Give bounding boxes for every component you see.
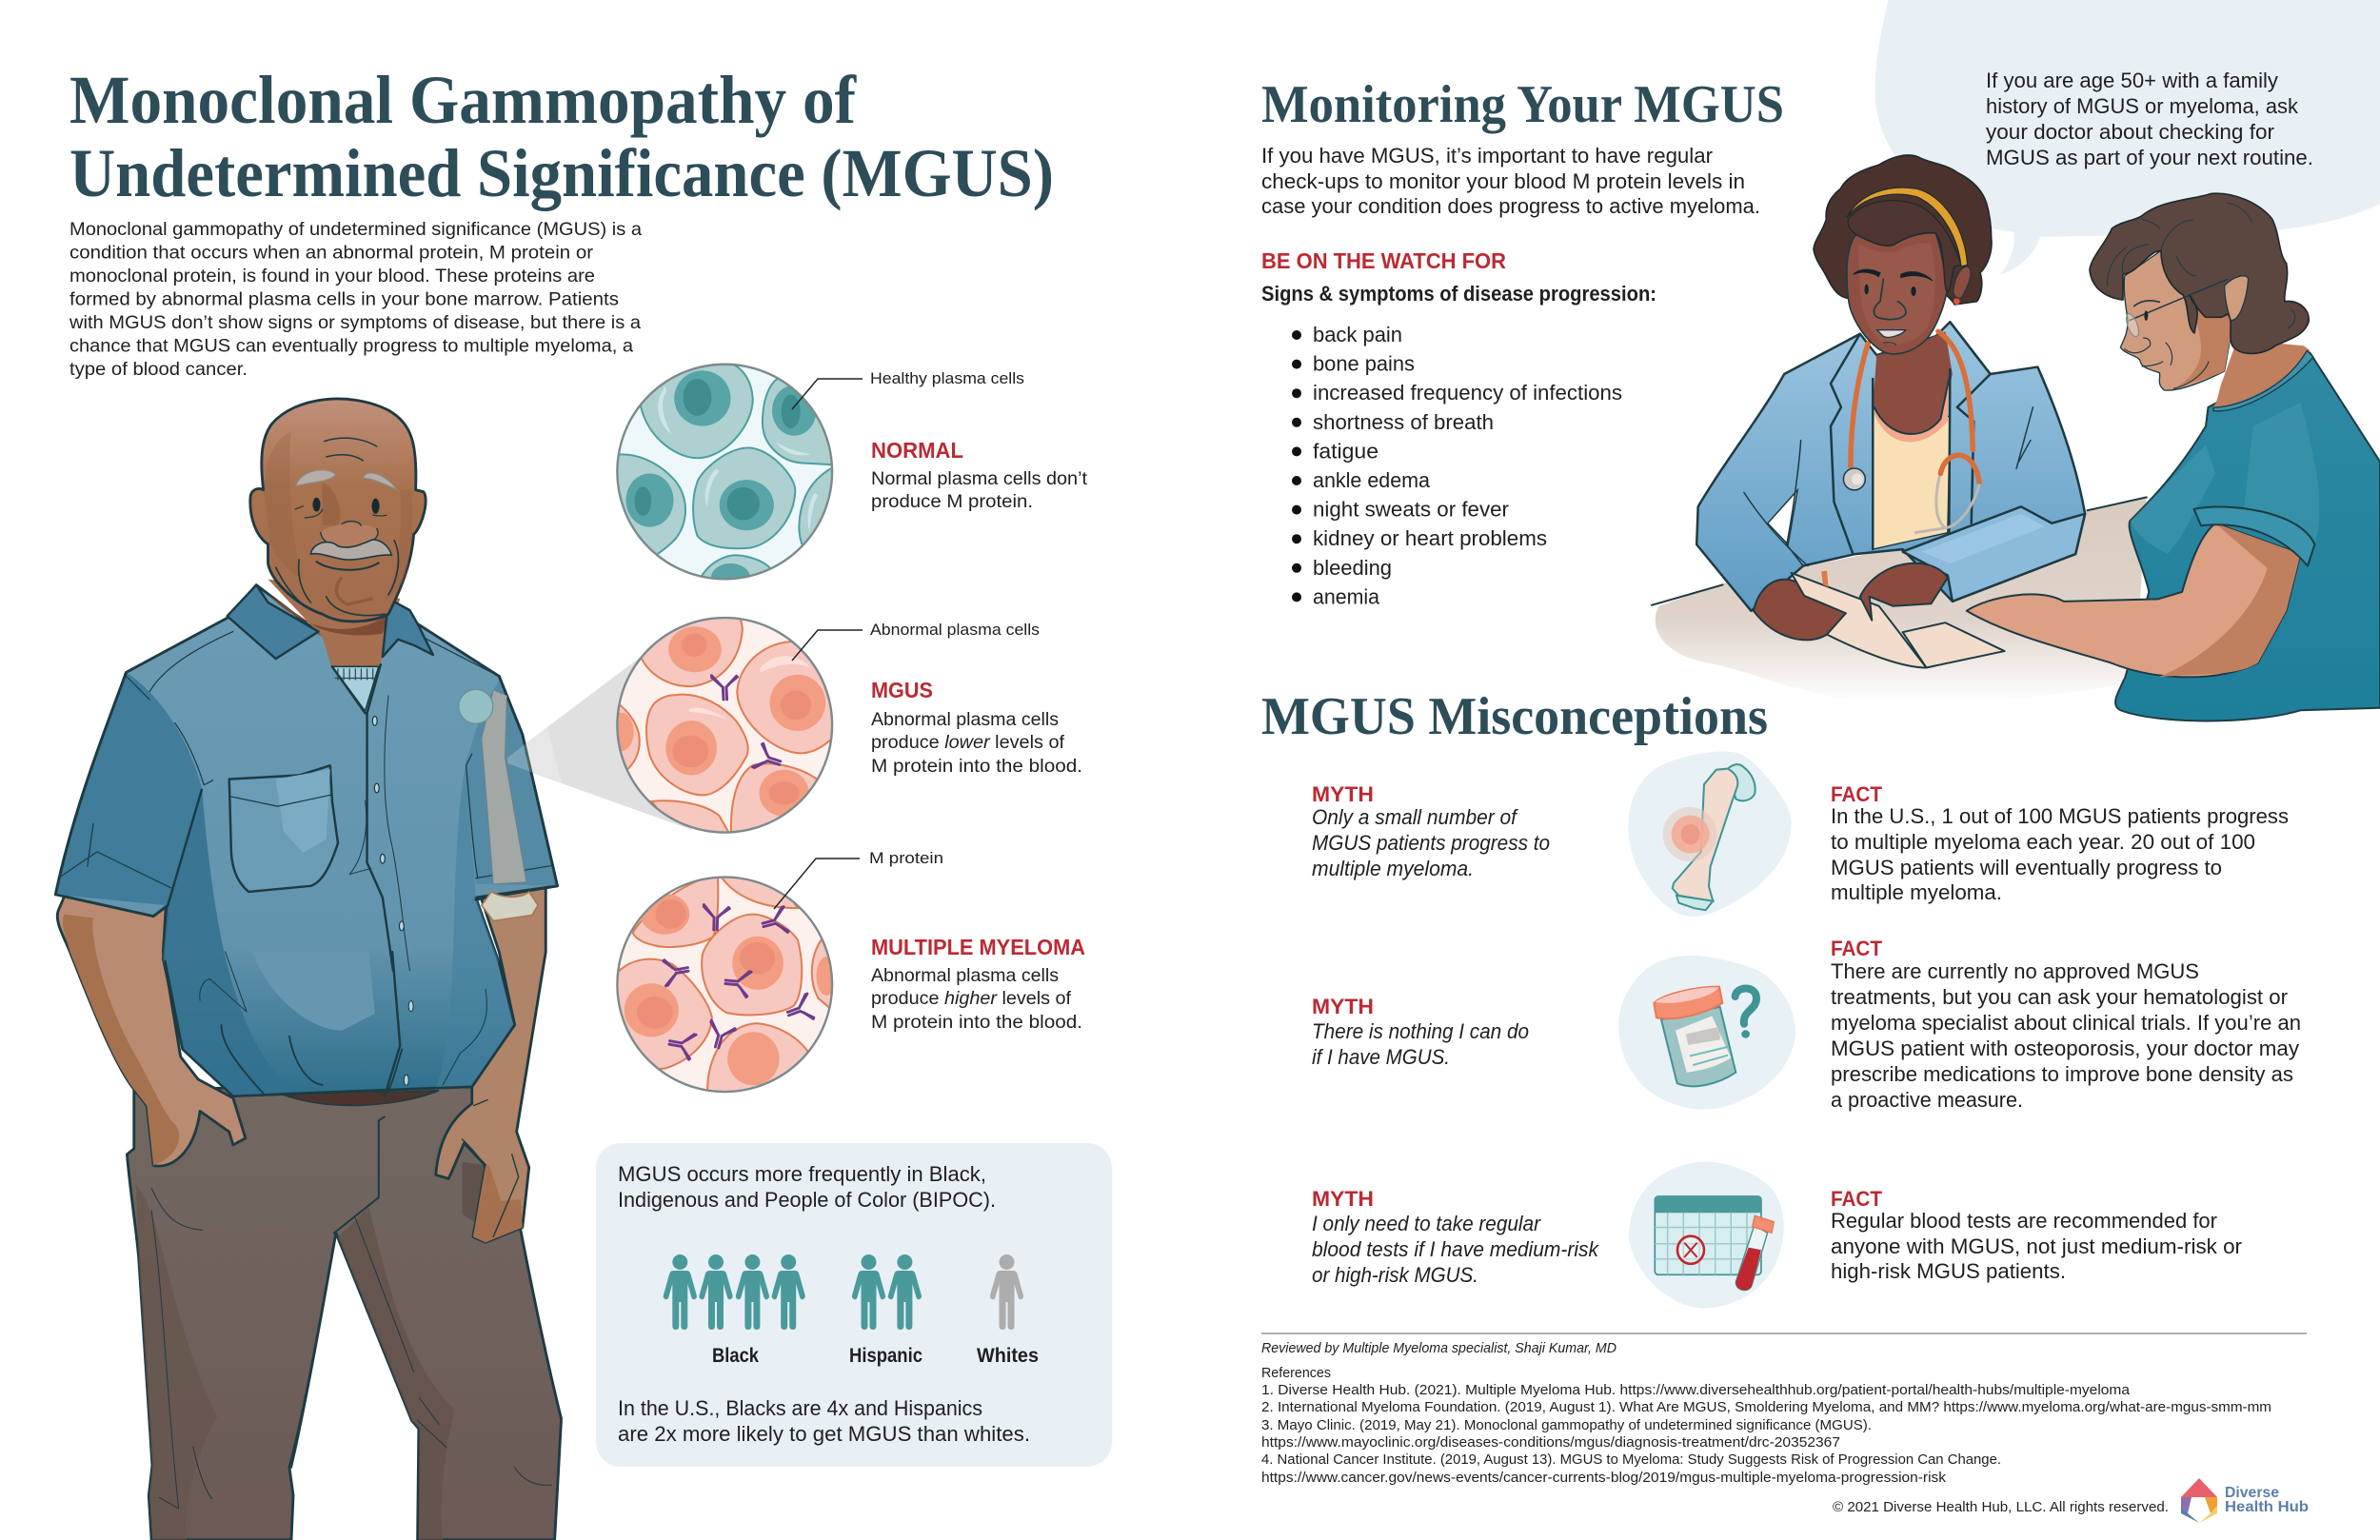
fact 3: Regular blood tests are recommended for <box>1831 1209 2217 1233</box>
callout cone from bone to MGUS circle <box>506 657 692 830</box>
references: https://www.cancer.gov/news-events/cancer-currents-blog/2019/mgus-multiple-myeloma-progression-risk <box>1261 1471 1947 1486</box>
symptom list: increased frequency of infections <box>1313 381 1622 405</box>
symptom list: kidney or heart problems <box>1313 526 1547 550</box>
pocket <box>229 765 338 892</box>
heading: misconceptions: MGUS Misconceptions <box>1261 687 1768 746</box>
icon: logo hexagon <box>2181 1478 2217 1523</box>
fact 2: MGUS patient with osteoporosis, your doctor may <box>1831 1037 2300 1060</box>
myth 1: MYTH <box>1312 782 1374 806</box>
panel: BIPOC statistic box: Whites <box>977 1345 1039 1367</box>
heading: monitoring: Monitoring Your MGUS <box>1261 75 1784 134</box>
cell labels and descriptions: Abnormal plasma cells <box>871 709 1059 730</box>
myth 1: MGUS patients progress to <box>1312 831 1550 855</box>
myth 1: Only a small number of <box>1312 805 1519 829</box>
panel: BIPOC statistic box <box>596 1143 1112 1467</box>
speech bubble <box>1875 0 2380 275</box>
intro text block: monoclonal protein, is found in your blood. These proteins are <box>69 266 595 286</box>
shirt <box>55 399 557 1096</box>
panel: BIPOC statistic box: are 2x more likely to get MGUS than whites. <box>618 1422 1030 1446</box>
speech bubble text: history of MGUS or myeloma, ask <box>1986 94 2299 118</box>
symptom list <box>1292 323 1622 608</box>
icon: bone with pain <box>1628 752 1792 917</box>
intro text block: formed by abnormal plasma cells in your bone marrow. Patients <box>69 289 619 310</box>
patient arm <box>1967 523 2300 677</box>
panel: BIPOC statistic box: In the U.S., Blacks are 4x and Hispanics <box>618 1396 982 1420</box>
monitoring text: If you have MGUS, it’s important to have regular <box>1261 144 1713 168</box>
watch for heading: Signs & symptoms of disease progression: <box>1261 282 1656 306</box>
pants <box>127 1087 562 1540</box>
intro text block <box>69 219 642 380</box>
M protein antibodies <box>662 674 816 1060</box>
fact 2 <box>1831 937 2301 1112</box>
cell labels and descriptions <box>869 369 1088 1033</box>
logo: Health Hub <box>2225 1499 2309 1515</box>
references: References <box>1261 1366 1331 1381</box>
myth 2: MYTH <box>1312 995 1374 1018</box>
fact 3 <box>1831 1187 2242 1283</box>
logo <box>2181 1478 2309 1523</box>
panel: BIPOC statistic box: MGUS occurs more frequently in Black, <box>618 1162 986 1186</box>
stethoscope <box>1851 331 1979 483</box>
watch for heading <box>1261 248 1656 306</box>
title: Monoclonal Gammopathy of <box>69 62 857 138</box>
table <box>1656 497 2147 702</box>
undershirt <box>332 666 379 711</box>
fact 2: a proactive measure. <box>1831 1088 2023 1112</box>
myth 3: blood tests if I have medium-risk <box>1312 1237 1600 1261</box>
cell labels and descriptions: produce lower levels of <box>871 732 1065 753</box>
fact 1: MGUS patients will eventually progress to <box>1831 856 2222 879</box>
arms and hands <box>57 888 545 1242</box>
cell labels and descriptions: M protein into the blood. <box>871 756 1082 777</box>
icons: people <box>664 1254 1023 1330</box>
myth 1 <box>1312 782 1550 880</box>
panel: BIPOC statistic box: Indigenous and People of Color (BIPOC). <box>618 1188 996 1212</box>
references: 4. National Cancer Institute. (2019, August 13). MGUS to Myeloma: Study Suggests Risk of Progression Can Change. <box>1261 1452 2001 1468</box>
cell labels and descriptions: MGUS <box>871 678 933 702</box>
fact 1: multiple myeloma. <box>1831 880 2002 904</box>
cell labels and descriptions: MULTIPLE MYELOMA <box>871 935 1085 959</box>
myth 3: MYTH <box>1312 1187 1374 1211</box>
fact 2: FACT <box>1831 937 1882 960</box>
intro text block: type of blood cancer. <box>69 359 248 380</box>
copyright: © 2021 Diverse Health Hub, LLC. All rights reserved. <box>1833 1500 2169 1515</box>
cell labels and descriptions: Normal plasma cells don’t <box>871 468 1088 489</box>
fact 3: high-risk MGUS patients. <box>1831 1259 2066 1283</box>
placket <box>367 713 393 971</box>
logo: Diverse <box>2225 1485 2279 1501</box>
myth 1: multiple myeloma. <box>1312 857 1474 880</box>
patient body <box>1967 353 2380 721</box>
fact 2: There are currently no approved MGUS <box>1831 959 2199 983</box>
patient head <box>2090 193 2313 411</box>
myth 3 <box>1312 1187 1600 1287</box>
cell labels and descriptions: Healthy plasma cells <box>870 369 1024 387</box>
symptom list: anemia <box>1313 584 1379 608</box>
myth 3: I only need to take regular <box>1312 1212 1541 1235</box>
cell labels and descriptions: produce higher levels of <box>871 988 1072 1009</box>
myth 2 <box>1312 995 1529 1069</box>
fact 3: FACT <box>1831 1187 1882 1211</box>
panel: MGUS cells circle <box>608 615 835 836</box>
doctor head <box>1814 155 1992 354</box>
references: 2. International Myeloma Foundation. (2019, August 1). What Are MGUS, Smoldering Myeloma, and MM? https://www.myeloma.org/what-are-mgus-smm-mm <box>1261 1400 2271 1415</box>
symptom list: shortness of breath <box>1313 410 1494 434</box>
collar <box>228 585 319 659</box>
cell labels and descriptions: produce M protein. <box>871 491 1033 512</box>
icon: jar with question mark <box>1618 956 1795 1110</box>
monitoring text: case your condition does progress to active myeloma. <box>1261 194 1760 218</box>
cell labels and descriptions: NORMAL <box>871 438 963 463</box>
panel: BIPOC statistic box: Black <box>712 1345 759 1367</box>
intro text block: Monoclonal gammopathy of undetermined significance (MGUS) is a <box>69 219 642 240</box>
patient sleeve <box>2194 506 2314 566</box>
title: Undetermined Significance (MGUS) <box>69 135 1054 211</box>
symptom list: night sweats or fever <box>1313 498 1509 522</box>
doctor sleeve <box>1903 506 2085 602</box>
fact 1: to multiple myeloma each year. 20 out of 100 <box>1831 830 2255 854</box>
symptom list: bone pains <box>1313 352 1415 376</box>
symptom list: ankle edema <box>1313 468 1430 492</box>
fact 1 <box>1831 782 2289 904</box>
bone inside arm <box>459 689 538 921</box>
references: 1. Diverse Health Hub. (2021). Multiple Myeloma Hub. https://www.diversehealthhub.org/patient-portal/health-hubs/multiple-myeloma <box>1261 1383 2131 1398</box>
illustration: man with bone <box>55 399 562 1540</box>
panel: normal cells circle <box>614 362 835 593</box>
symptom list: fatigue <box>1313 439 1378 463</box>
panel: multiple myeloma cells circle <box>614 872 837 1096</box>
myth 2: if I have MGUS. <box>1312 1045 1450 1069</box>
illustration: doctor and patient <box>1652 155 2380 721</box>
speech bubble text <box>1986 69 2313 169</box>
cell labels and descriptions: Abnormal plasma cells <box>871 965 1059 986</box>
symptom list: bleeding <box>1313 556 1392 580</box>
fact 2: treatments, but you can ask your hematologist or <box>1831 985 2288 1009</box>
fact 1: In the U.S., 1 out of 100 MGUS patients progress <box>1831 804 2289 828</box>
intro text block: chance that MGUS can eventually progress to multiple myeloma, a <box>69 335 633 356</box>
symptom list: back pain <box>1313 323 1402 346</box>
neck <box>268 579 400 668</box>
head <box>250 399 426 622</box>
myth 3: or high-risk MGUS. <box>1312 1263 1478 1287</box>
fact 2: myeloma specialist about clinical trials. If you’re an <box>1831 1011 2301 1035</box>
cell labels and descriptions: M protein <box>869 849 943 867</box>
speech bubble text: If you are age 50+ with a family <box>1986 69 2279 92</box>
references: https://www.mayoclinic.org/diseases-conditions/mgus/diagnosis-treatment/drc-20352367 <box>1261 1435 1840 1451</box>
shirt lower shading <box>165 952 515 1096</box>
papers and doctor hands <box>1903 622 2005 667</box>
monitoring text <box>1261 144 1760 218</box>
fact 3: anyone with MGUS, not just medium-risk or <box>1831 1234 2242 1258</box>
doctor body <box>1696 322 2085 667</box>
fact 1: FACT <box>1831 782 1882 806</box>
watch for heading: BE ON THE WATCH FOR <box>1261 248 1506 273</box>
references: Reviewed by Multiple Myeloma specialist, Shaji Kumar, MD <box>1261 1341 1616 1356</box>
speech bubble text: your doctor about checking for <box>1986 120 2274 144</box>
icon: calendar and blood tube <box>1629 1162 1784 1309</box>
title <box>69 62 1054 211</box>
cell labels and descriptions: Abnormal plasma cells <box>870 621 1040 639</box>
cone over shirt <box>507 727 562 783</box>
cell labels and descriptions: M protein into the blood. <box>871 1012 1082 1033</box>
speech bubble text: MGUS as part of your next routine. <box>1986 146 2313 169</box>
intro text block: with MGUS don’t show signs or symptoms of disease, but there is a <box>69 312 641 333</box>
references: 3. Mayo Clinic. (2019, May 21). Monoclonal gammopathy of undetermined significance (MGUS). <box>1261 1418 1872 1433</box>
fact 2: prescribe medications to improve bone density as <box>1831 1062 2293 1086</box>
references <box>1261 1341 2271 1486</box>
myth 2: There is nothing I can do <box>1312 1019 1529 1043</box>
monitoring text: check-ups to monitor your blood M protein levels in <box>1261 169 1745 193</box>
leader lines <box>774 379 863 909</box>
intro text block: condition that occurs when an abnormal protein, M protein or <box>69 242 594 263</box>
panel: BIPOC statistic box: Hispanic <box>849 1345 922 1367</box>
